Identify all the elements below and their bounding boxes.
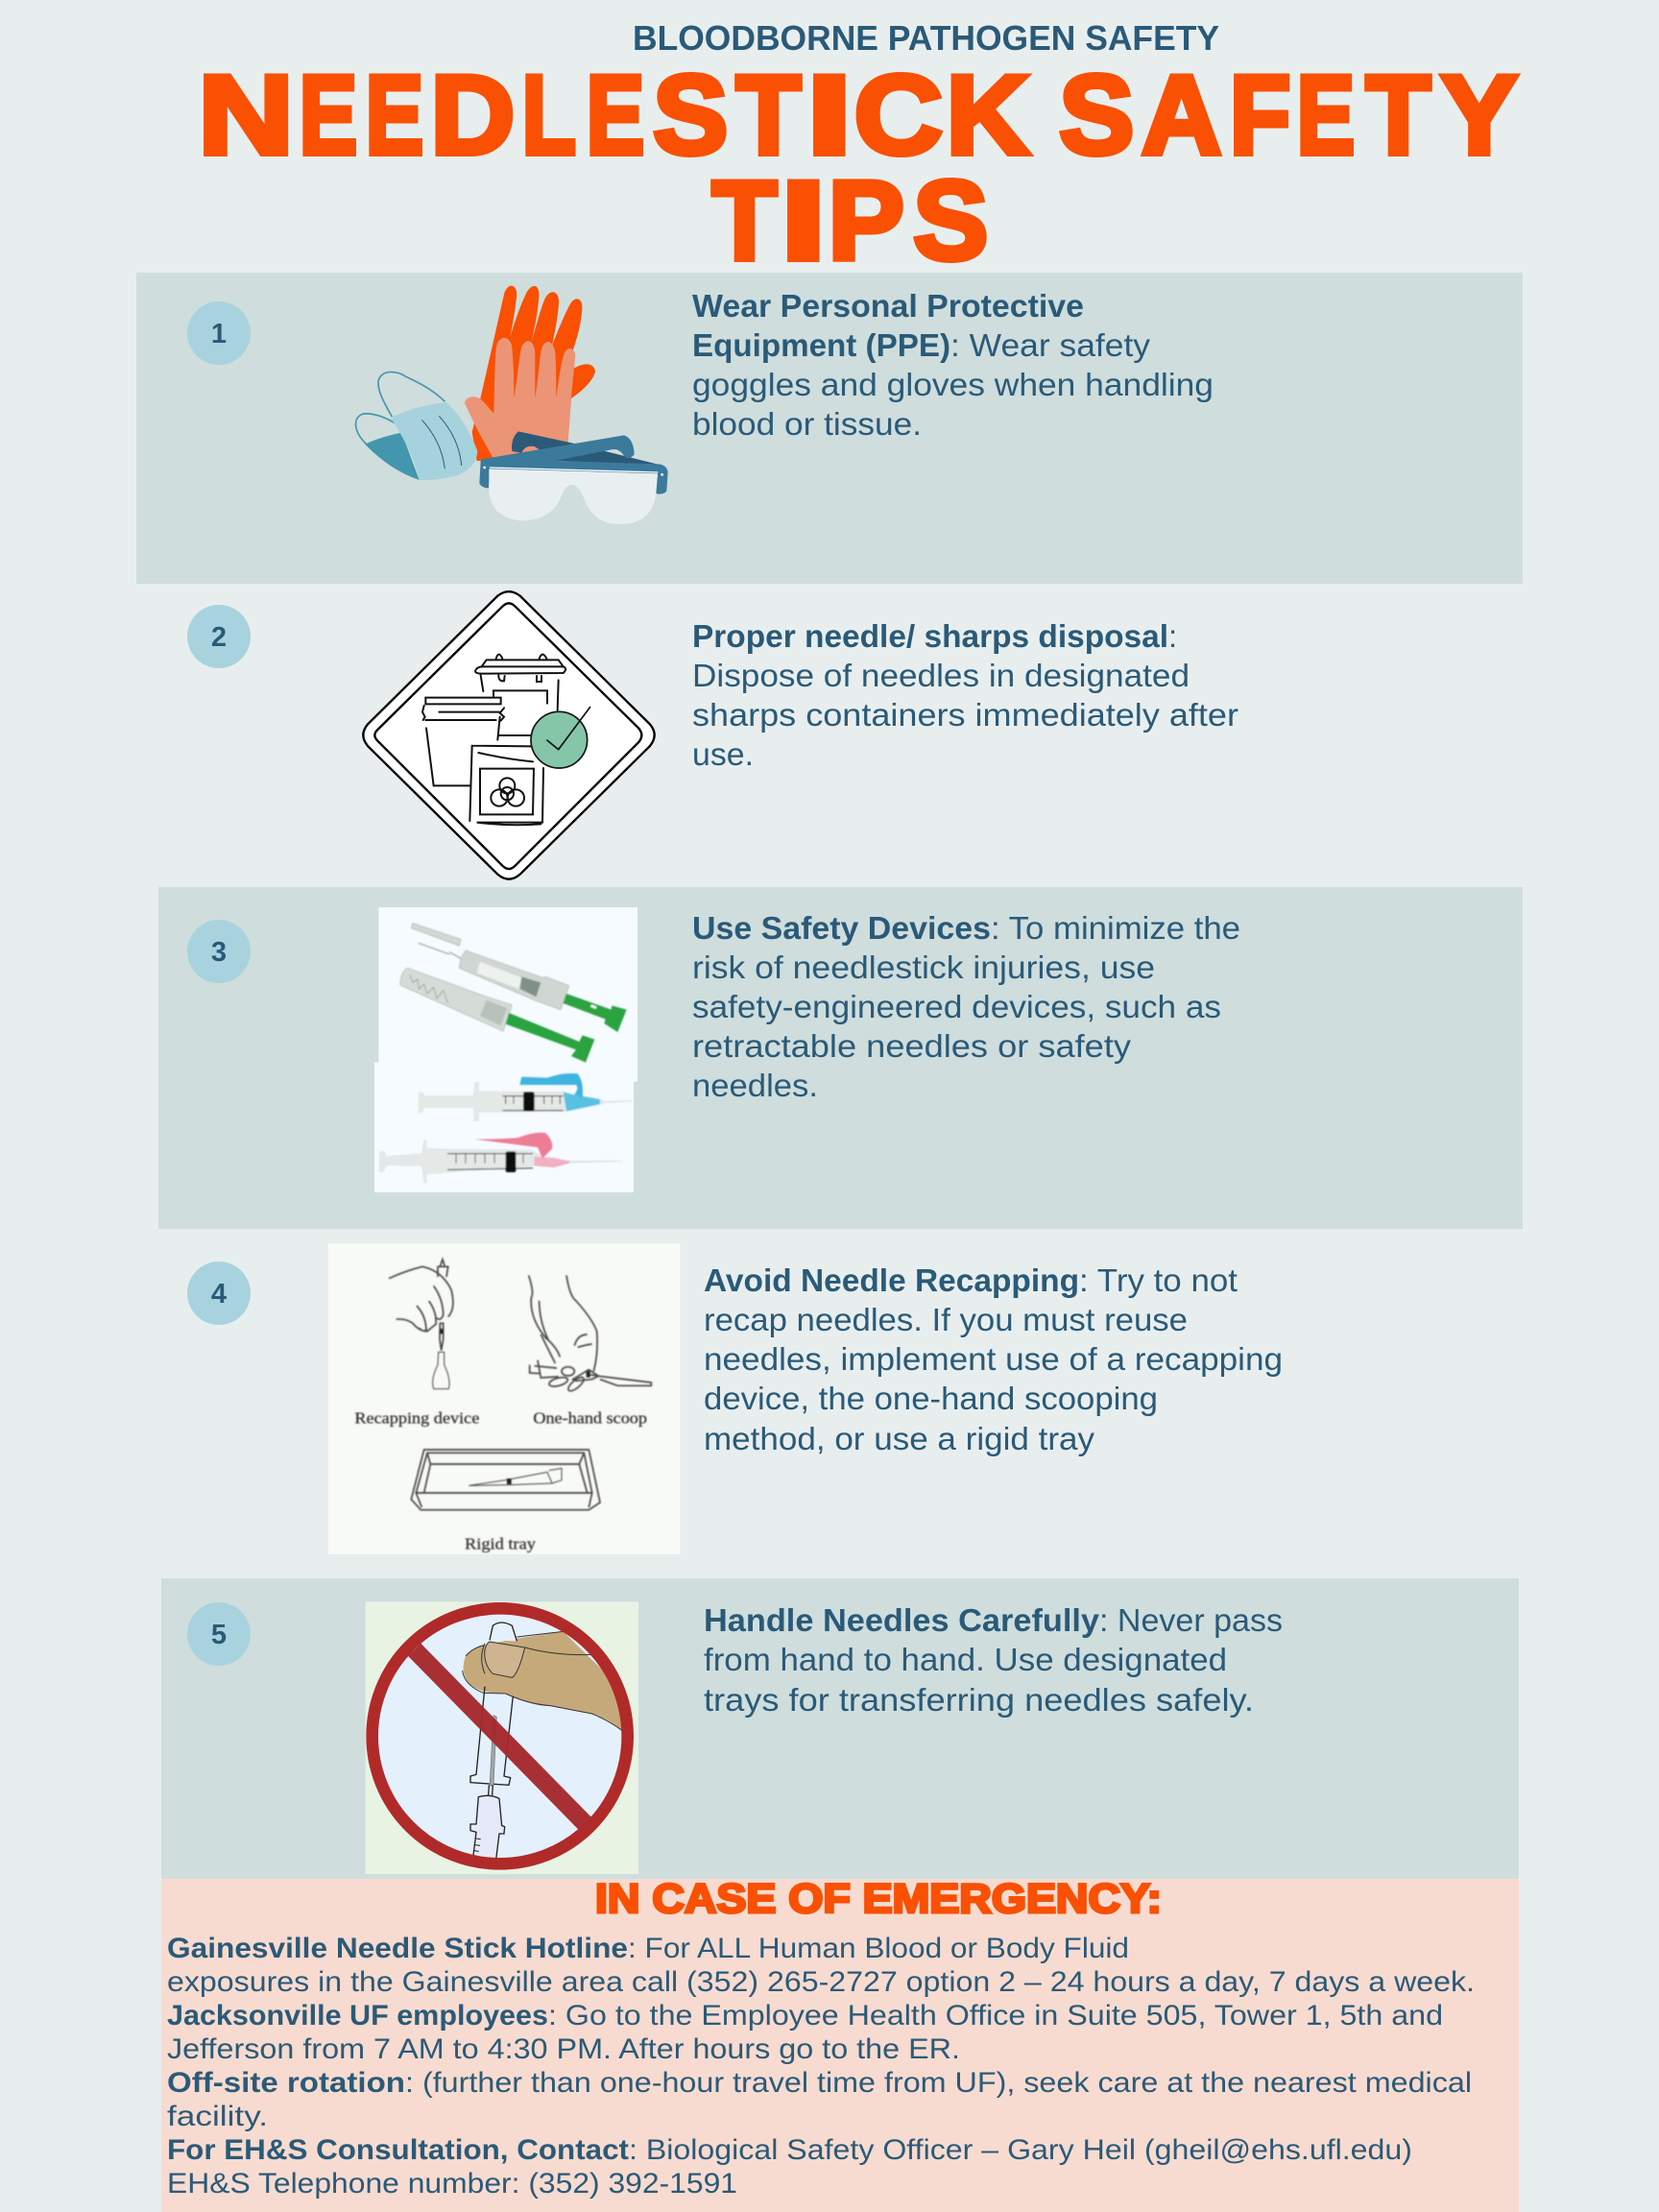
title: D [430, 52, 515, 178]
emergency contact text: : Go to the Employee Health Office in Suite 505, Tower 1, 5th and [548, 2000, 1443, 2032]
title: E [587, 52, 644, 178]
text: avoid recapping: Avoid Needle Recapping [704, 1262, 1079, 1298]
text: safety devices: risk of needlestick injuries, use [692, 950, 1155, 985]
text: avoid recapping: device, the one-hand scooping [704, 1381, 1158, 1416]
text: safety devices: needles. [692, 1068, 818, 1103]
text: sharps disposal: Proper needle/ sharps disposal [692, 618, 1168, 654]
step number 2: 2 [211, 622, 227, 653]
text: sharps disposal: sharps containers immediately after [692, 697, 1238, 733]
text: sharps disposal: use. [692, 736, 754, 772]
text: handle carefully: trays for transferring needles safely. [704, 1682, 1254, 1718]
title: P [829, 157, 904, 283]
title: L [522, 52, 576, 178]
title [198, 52, 1518, 283]
pink syringe [379, 1133, 622, 1183]
panel: step 2 sharps disposal [187, 591, 1238, 879]
text: wear PPE: Wear Personal Protective [692, 288, 1084, 324]
title: T [712, 157, 777, 283]
text: safety devices: Use Safety Devices [692, 910, 991, 946]
text: wear PPE [692, 288, 1214, 442]
text: safety devices: safety-engineered devices, such as [692, 989, 1221, 1024]
step number 5 [187, 1602, 251, 1666]
text: wear PPE: blood or tissue. [692, 406, 922, 442]
text: safety devices [692, 910, 1240, 1103]
text: wear PPE: Equipment (PPE) [692, 327, 950, 363]
title: I [806, 52, 853, 178]
text: sharps disposal: : [1168, 618, 1177, 654]
image: safety syringes [374, 907, 637, 1192]
image: recapping techniques: Recapping device [354, 1409, 479, 1428]
text: handle carefully: : Never pass [1099, 1602, 1283, 1638]
icon: sharps containers in diamond [363, 591, 655, 879]
text: wear PPE: : Wear safety [950, 327, 1151, 363]
title: Y [1441, 52, 1518, 178]
panel: step 4 avoid recapping [187, 1243, 1283, 1554]
text: wear PPE: goggles and gloves when handling [692, 367, 1214, 402]
icon: gloves, mask and goggles [356, 286, 668, 524]
text: handle carefully: from hand to hand. Use designated [704, 1642, 1227, 1677]
title: S [1059, 52, 1134, 178]
title: E [300, 52, 357, 178]
panel: step 1 PPE [136, 273, 1523, 584]
emergency heading: IN CASE OF EMERGENCY: [595, 1876, 1162, 1922]
emergency contact text: facility. [167, 2101, 268, 2132]
title: N [198, 52, 294, 178]
emergency contact text: : Biological Safety Officer – Gary Heil (gheil@ehs.ufl.edu) [629, 2134, 1412, 2166]
step number 1 [187, 301, 251, 365]
emergency contact text: For EH&S Consultation, Contact [167, 2134, 629, 2166]
step number 2 [187, 605, 251, 668]
step number 5: 5 [211, 1620, 227, 1650]
emergency contact text: exposures in the Gainesville area call (352) 265-2727 option 2 – 24 hours a day, 7 days a week. [167, 1966, 1475, 1998]
green syringes [400, 924, 627, 1063]
emergency contact text: : (further than one-hour travel time from UF), seek care at the nearest medical [405, 2067, 1472, 2099]
emergency contact text: Jacksonville UF employees [167, 2000, 548, 2032]
image: recapping techniques [328, 1243, 680, 1554]
text: avoid recapping: : Try to not [1079, 1262, 1238, 1298]
text: avoid recapping: recap needles. If you must reuse [704, 1302, 1188, 1337]
text: avoid recapping: method, or use a rigid tray [704, 1421, 1095, 1456]
text: safety devices: retractable needles or safety [692, 1028, 1132, 1064]
emergency contact text: Off-site rotation [167, 2067, 405, 2099]
emergency contact text [167, 1933, 1475, 2200]
emergency contact text: Gainesville Needle Stick Hotline [167, 1933, 628, 1964]
title: S [913, 157, 988, 283]
title: T [736, 52, 801, 178]
title: T [1366, 52, 1431, 178]
step number 3 [187, 920, 251, 983]
text: safety devices: : To minimize the [991, 910, 1240, 946]
title: A [1142, 52, 1221, 178]
panel: step 3 safety devices [158, 887, 1523, 1229]
image: recapping techniques: Rigid tray [465, 1534, 537, 1552]
icon: no hand-to-hand needle passing [366, 1601, 638, 1874]
title: F [1230, 52, 1290, 178]
step number 1: 1 [211, 319, 227, 349]
step number 4: 4 [211, 1279, 227, 1310]
title: S [653, 52, 728, 178]
emergency contact text: EH&S Telephone number: (352) 392-1591 [167, 2168, 737, 2200]
title: C [854, 52, 943, 178]
title: I [781, 157, 827, 283]
text: sharps disposal: Dispose of needles in designated [692, 658, 1190, 693]
text: avoid recapping [704, 1262, 1283, 1456]
panel: in case of emergency [161, 1876, 1519, 2212]
subtitle: BLOODBORNE PATHOGEN SAFETY [633, 18, 1219, 58]
text: handle carefully: Handle Needles Carefully [704, 1602, 1100, 1638]
image: recapping techniques: One-hand scoop [533, 1409, 647, 1428]
text: handle carefully [704, 1602, 1283, 1718]
text: sharps disposal [692, 618, 1238, 772]
emergency contact text: : For ALL Human Blood or Body Fluid [628, 1933, 1129, 1964]
step number 3: 3 [211, 937, 227, 968]
title: E [1297, 52, 1355, 178]
panel: step 5 handle carefully [161, 1578, 1519, 1879]
blue syringe [419, 1073, 633, 1120]
emergency contact text: Jefferson from 7 AM to 4:30 PM. After hours go to the ER. [167, 2033, 960, 2065]
title: E [366, 52, 423, 178]
title: K [947, 52, 1029, 178]
text: avoid recapping: needles, implement use of a recapping [704, 1341, 1283, 1377]
step number 4 [187, 1262, 251, 1325]
